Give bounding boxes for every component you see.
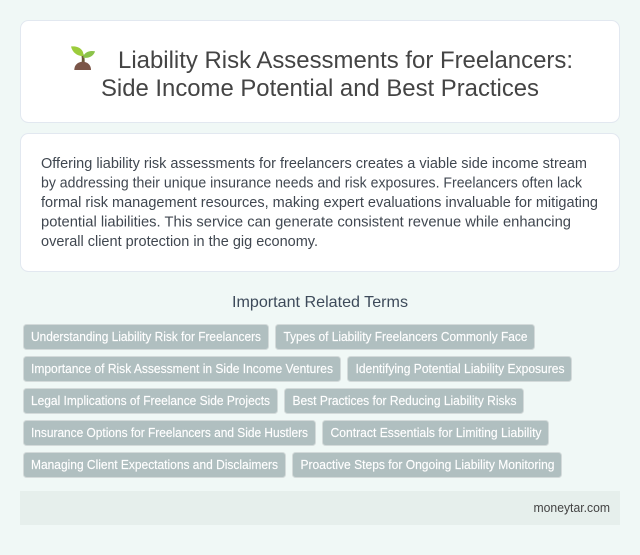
tag list: Legal Implications of Freelance Side Projects bbox=[31, 394, 270, 408]
title text: Side Income Potential and Best Practices bbox=[101, 75, 539, 102]
description text: overall client protection in the gig economy. bbox=[41, 234, 318, 250]
tag list: Understanding Liability Risk for Freelancers bbox=[31, 330, 261, 344]
description text: potential liabilities. This service can generate consistent revenue while enhancing bbox=[41, 214, 571, 230]
panel: description bbox=[20, 134, 620, 272]
tag list: Importance of Risk Assessment in Side Income Ventures bbox=[31, 362, 333, 376]
tag list: Best Practices for Reducing Liability Risks bbox=[292, 394, 516, 408]
tag list: Managing Client Expectations and Disclaimers bbox=[31, 458, 278, 472]
description text: by addressing their unique insurance needs and risk exposures. Freelancers often lack bbox=[41, 176, 583, 192]
tag list: Proactive Steps for Ongoing Liability Monitoring bbox=[300, 458, 555, 472]
tag list: Contract Essentials for Limiting Liability bbox=[330, 426, 542, 440]
title text: Liability Risk Assessments for Freelancers: bbox=[118, 47, 573, 74]
description text: formal risk management resources, making expert evaluations invaluable for mitigating bbox=[41, 195, 598, 211]
icon: sprout bbox=[71, 46, 95, 70]
tag list: Insurance Options for Freelancers and Side Hustlers bbox=[31, 426, 308, 440]
tag list bbox=[24, 324, 572, 478]
footer source text: moneytar.com bbox=[534, 501, 610, 515]
footer bbox=[20, 491, 620, 525]
description text bbox=[41, 156, 598, 250]
tag list: Types of Liability Freelancers Commonly Face bbox=[284, 330, 528, 344]
panel: title card bbox=[20, 20, 620, 122]
heading: related terms: Important Related Terms bbox=[232, 294, 408, 311]
tag list: Identifying Potential Liability Exposures bbox=[356, 362, 564, 376]
description text: Offering liability risk assessments for freelancers creates a viable side income stream bbox=[41, 156, 587, 172]
